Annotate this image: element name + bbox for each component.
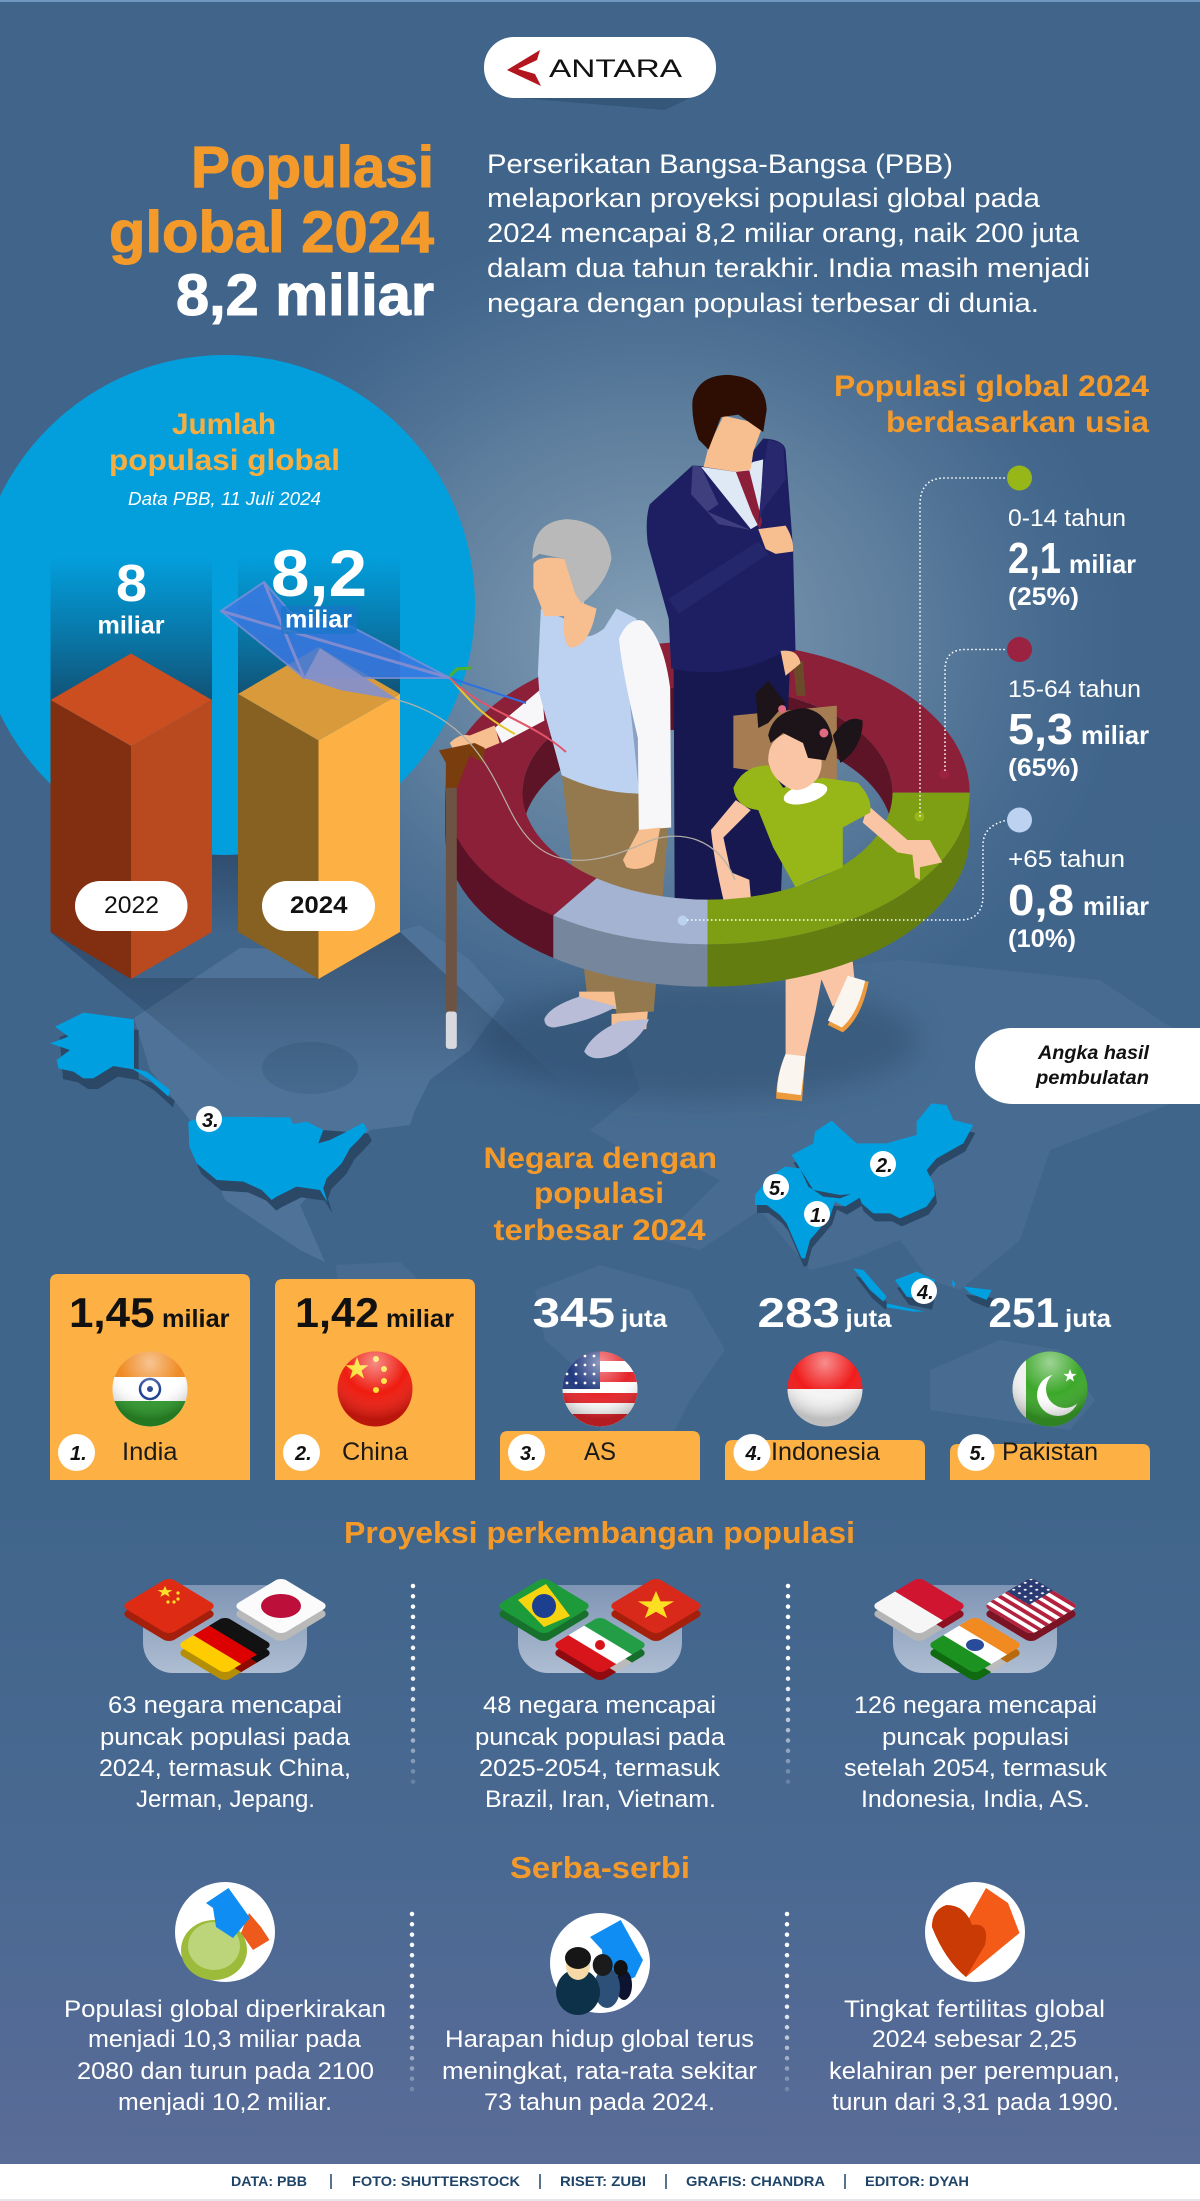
- text: trivia column 3: turun dari 3,31 pada 1990.: [832, 2089, 1119, 2116]
- text: trivia column 1: [64, 1996, 386, 2116]
- legend: 15-64 tahun: 15-64 tahun: [1008, 676, 1141, 703]
- heading: negara dengan populasi terbesar: terbesar 2024: [494, 1214, 706, 1247]
- text: trivia column 3: kelahiran per perempuan,: [829, 2058, 1120, 2085]
- intro paragraph: negara dengan populasi terbesar di dunia.: [487, 288, 1039, 318]
- icon: people with arrow: [550, 1913, 650, 2015]
- card 3: AS: AS: [584, 1438, 616, 1466]
- map number markers: 1.: [810, 1205, 827, 1227]
- ring back: [445, 641, 970, 958]
- intro paragraph: melaporkan proyeksi populasi global pada: [487, 183, 1041, 213]
- text: trivia column 2: Harapan hidup global terus: [445, 2026, 754, 2053]
- highlighted map: Asia: [755, 1103, 994, 1312]
- heading: serba-serbi: Serba-serbi: [510, 1850, 690, 1885]
- card 3: AS: juta: [620, 1305, 668, 1333]
- footer credits: GRAFIS: CHANDRA: [686, 2173, 825, 2189]
- intro paragraph: [487, 149, 1090, 318]
- text: projection column 2: puncak populasi pada: [475, 1724, 726, 1751]
- text: projection column 2: [475, 1692, 726, 1813]
- text: trivia column 2: [442, 2026, 757, 2116]
- card 5: Pakistan: 251: [988, 1289, 1059, 1336]
- ring front: [445, 793, 970, 987]
- legend: 15-64 tahun: (65%): [1008, 754, 1079, 782]
- footer credits: DATA: PBB: [231, 2173, 307, 2189]
- connector dots on ring: [678, 769, 949, 925]
- old woman legs: [544, 773, 671, 1058]
- kite: [221, 582, 735, 880]
- card 5: Pakistan: Pakistan: [1002, 1438, 1098, 1466]
- card 5: Pakistan: 5.: [970, 1443, 986, 1465]
- legend: +65 tahun: +65 tahun: [1008, 846, 1125, 873]
- text: trivia column 3: 2024 sebesar 2,25: [872, 2026, 1077, 2053]
- logo: ANTARA: [484, 37, 716, 110]
- title: Populasi: [191, 135, 434, 200]
- card 1: India: [50, 1274, 250, 1480]
- heading: negara dengan populasi terbesar: [484, 1142, 717, 1247]
- heading: populasi berdasarkan usia: Populasi global 2024: [834, 370, 1149, 403]
- card 4: Indonesia: [725, 1289, 925, 1480]
- title: [109, 135, 434, 328]
- footer credits: FOTO: SHUTTERSTOCK: [352, 2173, 520, 2189]
- text: projection column 3: [844, 1692, 1108, 1813]
- flag group: Indonesia, AS, India: [871, 1577, 1079, 1682]
- map number markers: 4.: [916, 1282, 934, 1304]
- text: projection column 1: 63 negara mencapai: [108, 1692, 342, 1719]
- text: trivia column 1: Populasi global diperkirakan: [64, 1996, 386, 2023]
- legend: +65 tahun: miliar: [1083, 891, 1149, 921]
- old woman upper body and cane: [439, 519, 671, 1049]
- intro paragraph: 2024 mencapai 8,2 miliar orang, naik 200 juta: [487, 218, 1080, 248]
- card 3: AS: 345: [532, 1289, 615, 1336]
- map number markers: [196, 1106, 937, 1304]
- card 1: India: 1.: [70, 1443, 87, 1465]
- text: projection column 1: Jerman, Jepang.: [136, 1786, 315, 1813]
- text: projection column 3: puncak populasi: [882, 1724, 1069, 1751]
- card 3: AS: [500, 1289, 700, 1480]
- bar 2022: [50, 555, 212, 979]
- girl legs: [776, 962, 869, 1101]
- heading: jumlah populasi global: populasi global: [109, 444, 340, 477]
- card 5: Pakistan: [950, 1289, 1150, 1480]
- card 1: India: 1,45: [69, 1289, 154, 1336]
- logo: ANTARA: ANTARA: [549, 55, 682, 83]
- bar 2022: 2022: [104, 892, 159, 919]
- legend: +65 tahun: 0,8: [1008, 876, 1074, 925]
- label: 8,2 miliar above kite: 8,2: [271, 536, 367, 610]
- card 1: India: miliar: [162, 1305, 230, 1333]
- icon: globe with arrows: [175, 1882, 275, 1982]
- card 2: China: 1,42: [295, 1289, 379, 1336]
- ring chart and figures back layer: [439, 375, 970, 1101]
- card 4: Indonesia: Indonesia: [771, 1438, 880, 1466]
- legend: 15-64 tahun: miliar: [1081, 720, 1149, 750]
- man: [647, 375, 837, 902]
- intro paragraph: Perserikatan Bangsa-Bangsa (PBB): [487, 149, 953, 179]
- heading: populasi berdasarkan usia: berdasarkan usia: [886, 406, 1149, 439]
- footer credits: RISET: ZUBI: [560, 2173, 646, 2189]
- card 2: China: China: [342, 1438, 408, 1466]
- callout: angka hasil pembulatan: [975, 1028, 1200, 1104]
- map number markers: 2.: [875, 1155, 893, 1177]
- text: projection column 3: setelah 2054, termasuk: [844, 1755, 1108, 1782]
- map number markers: 5.: [769, 1178, 786, 1200]
- label: 8,2 miliar above kite: miliar: [285, 606, 352, 634]
- text: trivia column 1: menjadi 10,3 miliar pada: [88, 2026, 362, 2053]
- card 5: Pakistan: juta: [1064, 1305, 1112, 1333]
- legend: +65 tahun: [1007, 808, 1149, 953]
- highlighted map: USA: [50, 1013, 372, 1213]
- text: trivia column 1: menjadi 10,2 miliar.: [118, 2089, 332, 2116]
- card 2: China: miliar: [386, 1305, 454, 1333]
- text: projection column 3: 126 negara mencapai: [854, 1692, 1097, 1719]
- legend: 0-14 tahun: 2,1: [1008, 534, 1061, 583]
- heading: jumlah populasi global: [109, 408, 340, 509]
- legend: 15-64 tahun: 5,3: [1008, 705, 1073, 754]
- card 3: AS: 3.: [520, 1443, 537, 1465]
- text: projection column 2: 2025-2054, termasuk: [479, 1755, 721, 1782]
- panel: blue circle: [0, 355, 475, 855]
- title: global 2024: [109, 200, 434, 265]
- heading: populasi berdasarkan usia: [834, 370, 1149, 439]
- card 4: Indonesia: 283: [758, 1289, 840, 1336]
- heading: proyeksi perkembangan populasi: Proyeksi perkembangan populasi: [344, 1515, 855, 1550]
- text: projection column 1: puncak populasi pada: [100, 1724, 351, 1751]
- heading: negara dengan populasi terbesar: Negara dengan: [484, 1142, 717, 1175]
- bar columns fade: [50, 555, 400, 705]
- flag group: Brazil, Vietnam, Iran: [496, 1577, 704, 1682]
- text: projection column 1: 2024, termasuk China,: [99, 1755, 351, 1782]
- text: trivia column 2: meningkat, rata-rata sekitar: [442, 2058, 757, 2085]
- map number markers: 3.: [202, 1110, 219, 1132]
- text: projection column 2: Brazil, Iran, Vietnam.: [485, 1786, 716, 1813]
- bar 2024: [238, 647, 400, 979]
- text: trivia column 3: [829, 1996, 1120, 2116]
- legend: 0-14 tahun: [1007, 466, 1136, 611]
- bar 2022: miliar: [98, 612, 165, 640]
- callout: angka hasil pembulatan: Angka hasil: [1037, 1043, 1150, 1064]
- girl upper body: [711, 681, 942, 900]
- world map background: [50, 850, 1190, 1480]
- card 4: Indonesia: juta: [844, 1305, 893, 1333]
- heading: negara dengan populasi terbesar: populasi: [534, 1177, 664, 1210]
- intro paragraph: dalam dua tahun terakhir. India masih menjadi: [487, 253, 1090, 283]
- dotted connectors: [684, 478, 1008, 920]
- card 2: China: 2.: [294, 1443, 312, 1465]
- heading: jumlah populasi global: Jumlah: [172, 408, 276, 441]
- legend: 15-64 tahun: [1007, 637, 1149, 782]
- title: 8,2 miliar: [176, 263, 434, 328]
- legend: 0-14 tahun: miliar: [1069, 549, 1136, 579]
- legend: +65 tahun: (10%): [1008, 925, 1076, 953]
- icon: heart: [925, 1882, 1025, 1982]
- text: projection column 1: [99, 1692, 351, 1813]
- text: projection column 3: Indonesia, India, AS.: [861, 1786, 1090, 1813]
- card 2: China: [275, 1279, 475, 1480]
- footer credits: EDITOR: DYAH: [865, 2173, 969, 2189]
- flag group: China, Jepang, Jerman: [121, 1577, 329, 1682]
- text: trivia column 3: Tingkat fertilitas global: [844, 1996, 1105, 2023]
- text: trivia column 2: 73 tahun pada 2024.: [484, 2089, 715, 2116]
- footer credits: [0, 2164, 1200, 2201]
- ring inner wall: [522, 686, 893, 835]
- bar 2024: 2024: [290, 892, 348, 919]
- bar 2022: 8: [116, 555, 147, 613]
- card 1: India: India: [122, 1438, 178, 1466]
- card 4: Indonesia: 4.: [744, 1443, 762, 1465]
- callout: angka hasil pembulatan: pembulatan: [1035, 1068, 1149, 1089]
- heading: jumlah populasi global: Data PBB, 11 Juli 2024: [128, 489, 321, 509]
- legend: 0-14 tahun: 0-14 tahun: [1008, 505, 1126, 532]
- text: trivia column 1: 2080 dan turun pada 2100: [77, 2058, 374, 2085]
- text: projection column 2: 48 negara mencapai: [483, 1692, 716, 1719]
- legend: 0-14 tahun: (25%): [1008, 583, 1079, 611]
